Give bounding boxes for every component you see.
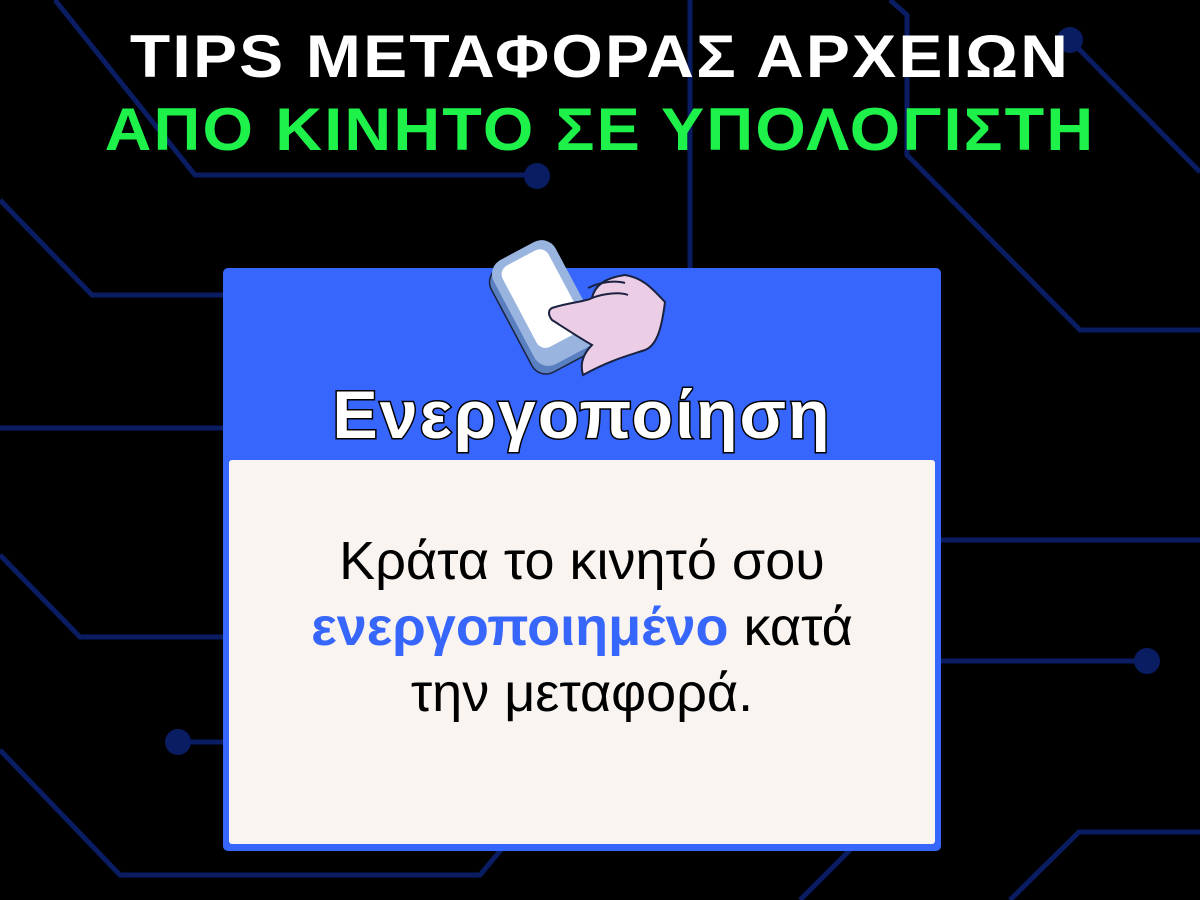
subtitle: ΑΠΟ ΚΙΝΗΤΟ ΣΕ ΥΠΟΛΟΓΙΣΤΗ	[105, 96, 1095, 163]
panel: tip card	[223, 268, 941, 851]
text block: την μεταφορά.	[411, 663, 753, 723]
text block	[229, 460, 935, 844]
text block: Κράτα το κινητό σου	[339, 531, 825, 591]
text block: ενεργοποιημένο κατά	[311, 597, 853, 657]
title: TIPS ΜΕΤΑΦΟΡΑΣ ΑΡΧΕΙΩΝ	[130, 23, 1070, 90]
heading: Ενεργοποίηση	[332, 377, 832, 453]
icon: phone with hand	[488, 240, 666, 376]
